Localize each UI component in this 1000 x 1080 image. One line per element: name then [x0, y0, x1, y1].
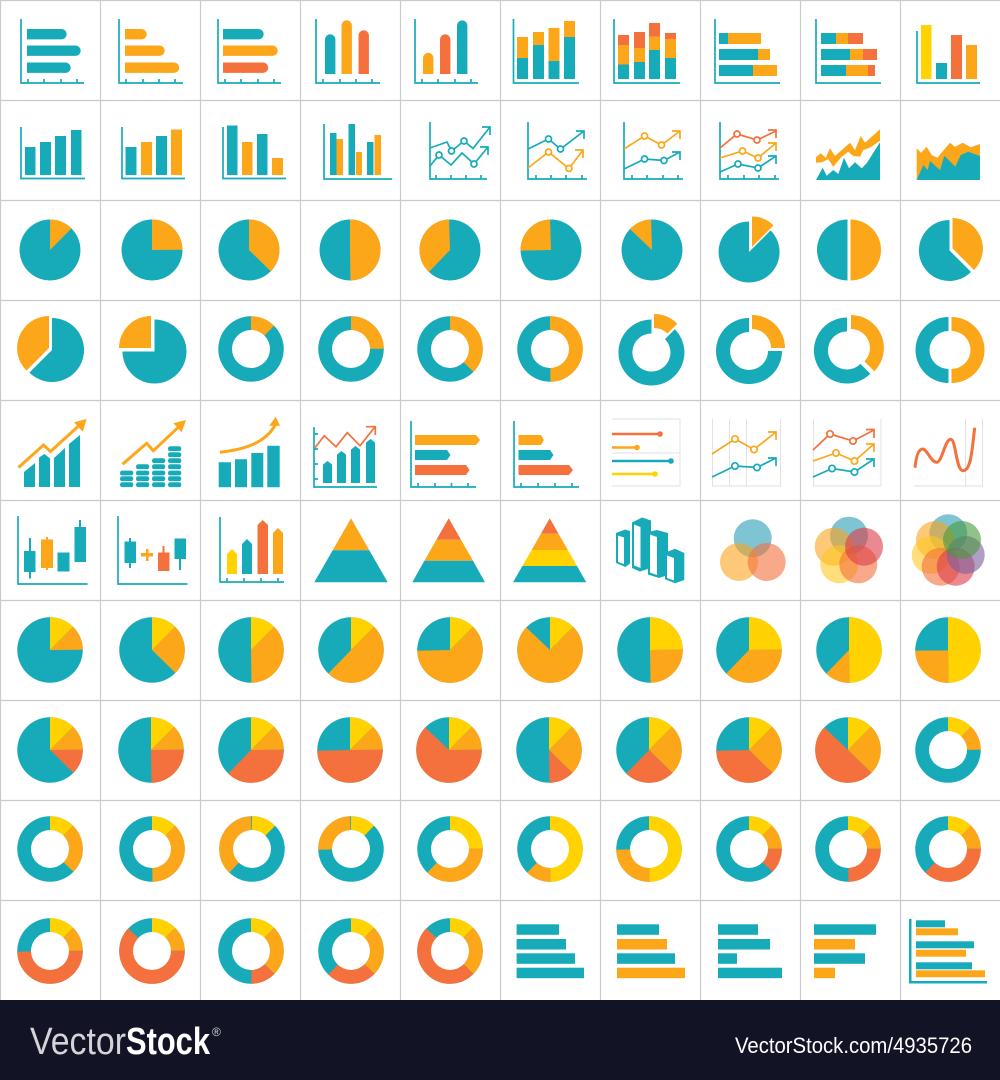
icon: stacked horizontal bars two colours: [715, 19, 780, 83]
icon: stacked bars two colours: [514, 19, 579, 83]
icon: area chart with gap: [816, 129, 880, 180]
icon: lollipop chart: [612, 419, 680, 486]
icon: donut yellow 4 orange 1: [517, 816, 583, 882]
icon: donut exploded three eighths: [814, 315, 884, 383]
icon: donut yellow 1 orange 2: [17, 816, 83, 882]
icon: pie yellow 1 orange 2: [119, 617, 185, 683]
icon: vertical rounded bars: [316, 19, 380, 83]
icon: pyramid four levels: [513, 518, 586, 582]
icon: horizontal rounded bars teal: [21, 19, 84, 83]
icon: pie three eighths left: [420, 220, 480, 280]
image id text: VectorStock.com/4935726: [735, 1033, 972, 1058]
icon: arrow columns with zigzag line: [314, 427, 377, 487]
icon: horizontal rounded bars orange: [119, 19, 183, 83]
icon: donut yellow 1 orange 1: [915, 717, 981, 783]
icon: bars with curved arrow: [219, 417, 280, 487]
icon: horizontal arrow bars: [411, 421, 480, 487]
icon: donut split in halves: [916, 317, 984, 383]
icon: grouped column chart: [324, 124, 392, 179]
icon: donut orange 2 red 2: [318, 918, 384, 984]
icon: pie half: [320, 220, 380, 280]
icon: donut three eighths: [417, 316, 483, 382]
icon: four part pie red 4: [317, 717, 383, 783]
icon: four part pie red 5: [416, 717, 482, 783]
icon: three line chart: [720, 122, 779, 179]
icon: stacked horizontal bars three colours: [816, 19, 881, 83]
icon: donut exploded eighth: [618, 314, 684, 385]
icon: three overlapping circles: [720, 519, 786, 581]
icon: uneven bars two colours: [814, 924, 876, 978]
icon: line chart teal and orange: [528, 122, 587, 179]
icon: donut orange 2 red 4: [417, 918, 483, 984]
icon: donut yellow teal orange 2: [318, 816, 384, 882]
icon: uneven bars teal: [718, 924, 782, 978]
icon: donut one eighth: [218, 316, 284, 382]
icon: seven overlapping circles: [912, 514, 985, 586]
icon: staircase bars two colours: [617, 924, 685, 978]
icon: donut four parts red 2: [815, 816, 881, 882]
icon: pie exploded three eighths: [919, 218, 983, 281]
icon: vertical rounded bars rising: [415, 19, 478, 83]
icon: pie yellow 1 orange 5: [417, 617, 483, 683]
icon: isometric 3D bars: [616, 518, 684, 583]
icon: column chart rising two colours: [122, 127, 185, 178]
icon: donut yellow 2 orange 3: [417, 816, 483, 882]
icon: four part pie orange 2 red 3: [716, 717, 782, 783]
icon: pie yellow 2 orange 3: [716, 617, 782, 683]
icon: donut orange 2 red 1: [218, 918, 284, 984]
icon: pie three eighths: [219, 220, 279, 280]
icon: coin stacks with arrow: [120, 420, 186, 487]
icon: multicolour column chart: [917, 25, 980, 83]
icon: donut four parts red 3: [915, 816, 981, 882]
icon: two teal line chart: [430, 122, 490, 179]
icon: pie one quarter: [122, 220, 182, 280]
icon: pie split in halves: [817, 220, 881, 280]
icon: column chart falling: [223, 126, 286, 178]
icon: donut yellow 4 orange 2: [616, 816, 682, 882]
icon: donut four parts red 4: [17, 918, 83, 984]
icon: grouped horizontal bars: [909, 919, 987, 984]
icon: column chart rising teal: [21, 127, 85, 178]
icon: four part pie red 2: [118, 717, 184, 783]
icon: candlestick chart with cross: [118, 516, 188, 584]
icon: pie exploded eighth: [719, 216, 780, 282]
icon: donut half: [517, 316, 583, 382]
icon: pie eighth left: [622, 220, 682, 280]
icon: donut one quarter: [318, 316, 384, 382]
icon: four part pie orange 2 red 2: [616, 717, 682, 783]
icon: four part pie orange 2 red 1: [516, 717, 582, 783]
icon: five overlapping circles: [815, 517, 883, 583]
icon: four part pie red 3: [218, 717, 284, 783]
icon: pyramid two levels: [314, 518, 388, 582]
icon: arrow columns multicolour: [220, 517, 284, 582]
icon: staircase bars teal: [517, 924, 584, 978]
icon: candlestick chart: [18, 516, 88, 584]
icon: four part pie red 1: [17, 717, 83, 783]
icon: donut exploded quarter: [716, 315, 785, 384]
icon: pie yellow 1 orange 4: [318, 617, 384, 683]
logo: VectorStock: VectorStock: [30, 1021, 229, 1063]
icon: pyramid three levels: [412, 518, 485, 582]
icon: donut yellow teal orange 3: [219, 816, 285, 882]
icon: pie yellow 4 orange 1: [816, 617, 882, 683]
icon: four part pie orange 2 red 4: [815, 717, 881, 783]
icon: pie quarter left: [521, 220, 581, 280]
icon: pie yellow 1 orange 3: [218, 617, 284, 683]
icon: line chart orange and teal: [624, 122, 683, 179]
icon: pie yellow 1 orange 6: [517, 617, 583, 683]
icon: donut yellow 1 orange 3: [119, 816, 185, 882]
icon: pie one eighth: [20, 220, 80, 280]
icon: horizontal arrow bars rising: [514, 421, 579, 487]
icon: donut four parts red 1: [716, 816, 782, 882]
icon: pie yellow 1 orange 1: [17, 617, 83, 683]
icon: two line chart on grid: [712, 419, 781, 486]
icon: donut four parts red 5: [119, 918, 185, 984]
icon: stacked bars three colours: [614, 19, 680, 83]
logo: VectorStock: ®: [212, 1025, 221, 1039]
icon: three line chart on grid: [813, 419, 881, 486]
icon: layered area chart: [917, 143, 980, 180]
icon: pie yellow 2 orange 2: [617, 617, 683, 683]
icon: smooth curve chart: [914, 419, 983, 486]
icon: pie exploded left: [17, 316, 84, 382]
icon: pie exploded quarter: [119, 316, 186, 384]
icon: horizontal rounded bars three colours: [218, 19, 281, 83]
icon: pie yellow 4 orange 2: [915, 617, 981, 683]
icon: rising bars with arrow: [18, 419, 87, 487]
footer band: [0, 1000, 1000, 1080]
